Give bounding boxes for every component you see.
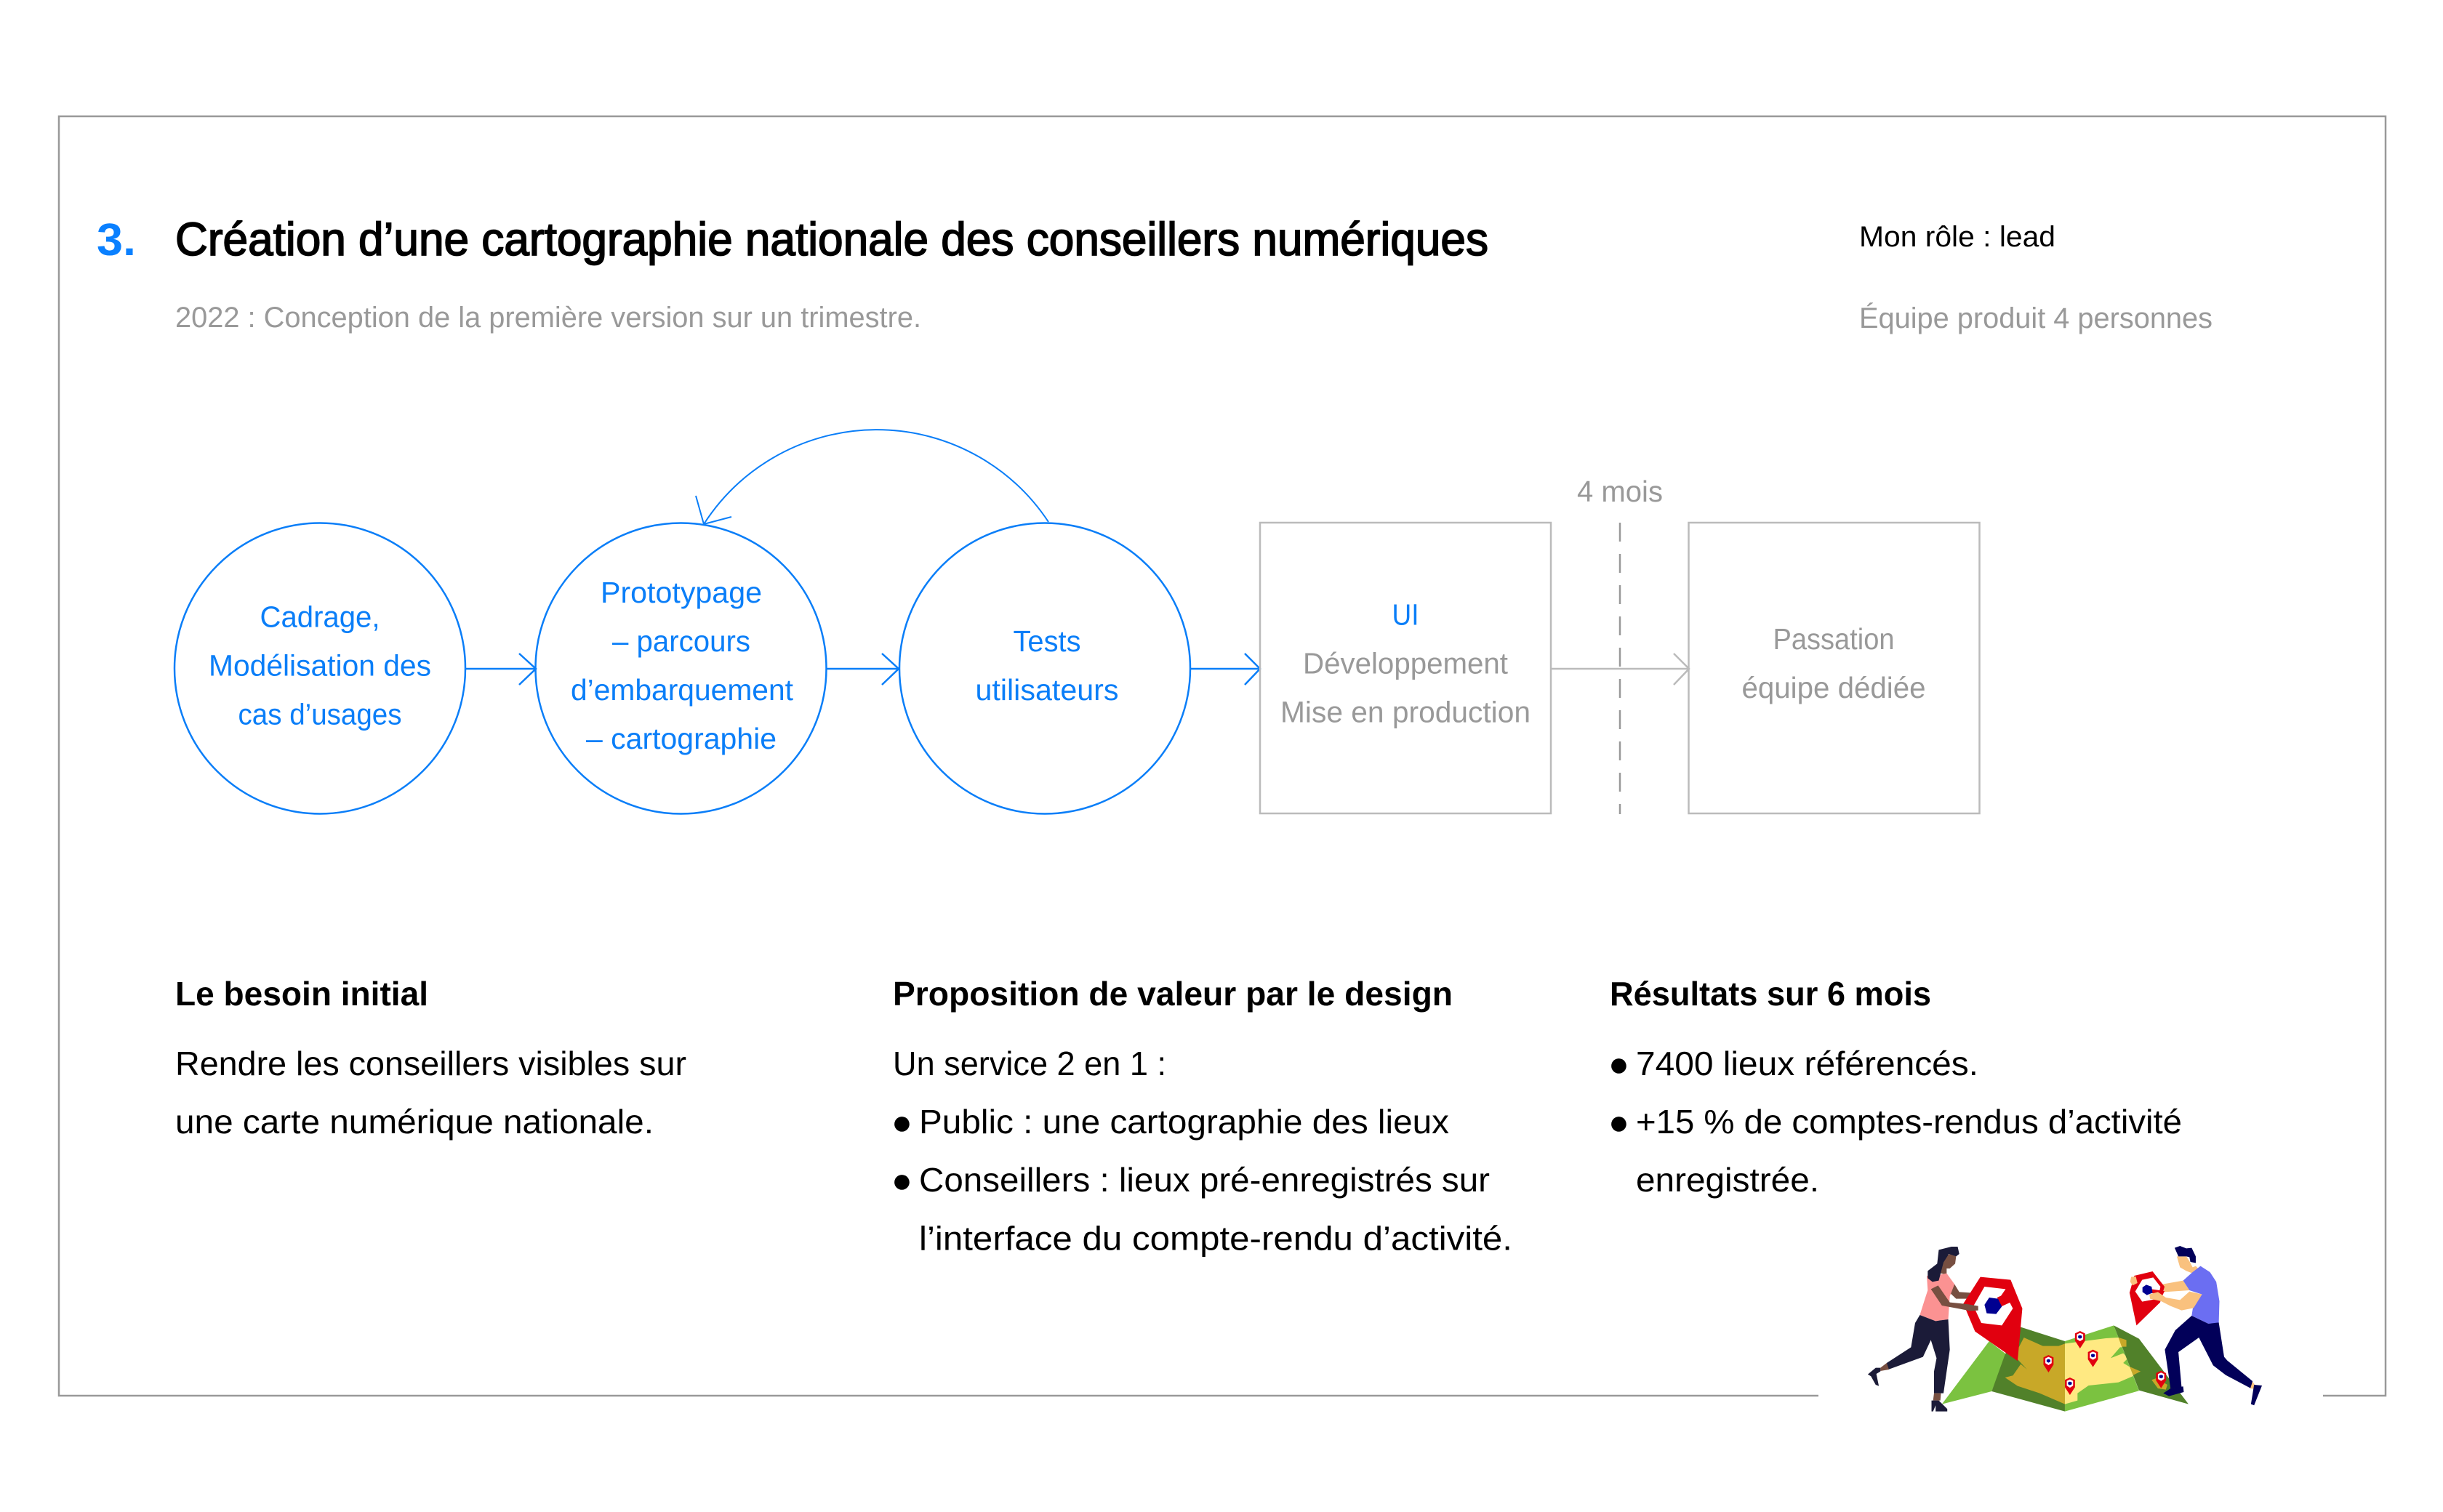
column: besoin initial: Le besoin initial: [175, 975, 428, 1013]
map: [1942, 1325, 2189, 1412]
process step: cadrage: [174, 523, 465, 814]
column: résultats: [1608, 975, 2182, 1199]
process step: cadrage: Cadrage,: [260, 600, 380, 634]
title: Création d’une cartographie nationale des conseillers numériques: [175, 213, 1488, 265]
process box: UI: UI: [1392, 598, 1419, 631]
woman: [1868, 1247, 1970, 1412]
process box: UI: Développement: [1303, 647, 1509, 680]
column: résultats: +15 % de comptes-rendus d’activité: [1636, 1103, 2182, 1141]
column: résultats: ●: [1608, 1103, 1629, 1142]
duration marker: 4 mois: [1577, 475, 1663, 508]
process step: tests: Tests: [1014, 624, 1080, 658]
large pin: [1963, 1277, 2022, 1361]
column: proposition de valeur: Public : une cartographie des lieux: [919, 1103, 1449, 1141]
arrow: feedback loop: [696, 430, 1048, 524]
column: besoin initial: une carte numérique nationale.: [175, 1103, 654, 1141]
process step: cadrage: Modélisation des: [209, 648, 431, 682]
process box: UI: Mise en production: [1280, 695, 1531, 728]
column: résultats: ●: [1608, 1045, 1629, 1084]
section number: 3.: [97, 215, 136, 265]
illustration: people placing pins on a map: [1868, 1246, 2262, 1412]
woman front arm: [1931, 1285, 1978, 1311]
column: résultats: Résultats sur 6 mois: [1610, 975, 1931, 1013]
column: proposition de valeur: Conseillers : lieux pré-enregistrés sur: [919, 1161, 1490, 1199]
process step: tests: utilisateurs: [976, 673, 1118, 707]
process box: UI: [1260, 523, 1551, 813]
column: proposition de valeur: ●: [891, 1162, 912, 1200]
man's arm and hands: [2130, 1276, 2202, 1311]
column: proposition de valeur: Proposition de valeur par le design: [893, 975, 1453, 1013]
process box: passation: équipe dédiée: [1742, 671, 1925, 704]
arrow: prototypage to tests: [826, 654, 899, 685]
process box: passation: [1688, 523, 1979, 813]
process step: tests: [899, 523, 1190, 814]
column: résultats: enregistrée.: [1636, 1161, 1819, 1199]
arrow: UI to passation: [1552, 654, 1689, 685]
process step: prototypage: – parcours: [612, 624, 750, 658]
column: proposition de valeur: Un service 2 en 1 :: [893, 1045, 1166, 1082]
arrow: tests to UI: [1190, 654, 1260, 685]
process step: cadrage: cas d’usages: [238, 698, 401, 731]
man's pin: [2130, 1271, 2165, 1325]
arrow: cadrage to prototypage: [465, 654, 536, 685]
process step: prototypage: [535, 523, 826, 814]
subtitle: 2022 : Conception de la première version sur un trimestre.: [175, 302, 921, 334]
column: proposition de valeur: l’interface du compte-rendu d’activité.: [919, 1220, 1512, 1258]
column: proposition de valeur: ●: [891, 1103, 912, 1142]
process step: prototypage: d’embarquement: [571, 673, 794, 707]
man: [2162, 1246, 2262, 1405]
process step: prototypage: – cartographie: [586, 722, 777, 755]
process step: prototypage: Prototypage: [601, 576, 762, 609]
small pins: [2043, 1331, 2166, 1395]
team: Équipe produit 4 personnes: [1859, 302, 2213, 334]
process box: passation: Passation: [1773, 622, 1895, 656]
role: Mon rôle : lead: [1859, 221, 2055, 253]
column: besoin initial: Rendre les conseillers visibles sur: [175, 1045, 686, 1082]
column: proposition de valeur: [891, 975, 1512, 1258]
column: besoin initial: [175, 975, 686, 1141]
column: résultats: 7400 lieux référencés.: [1636, 1045, 1978, 1082]
